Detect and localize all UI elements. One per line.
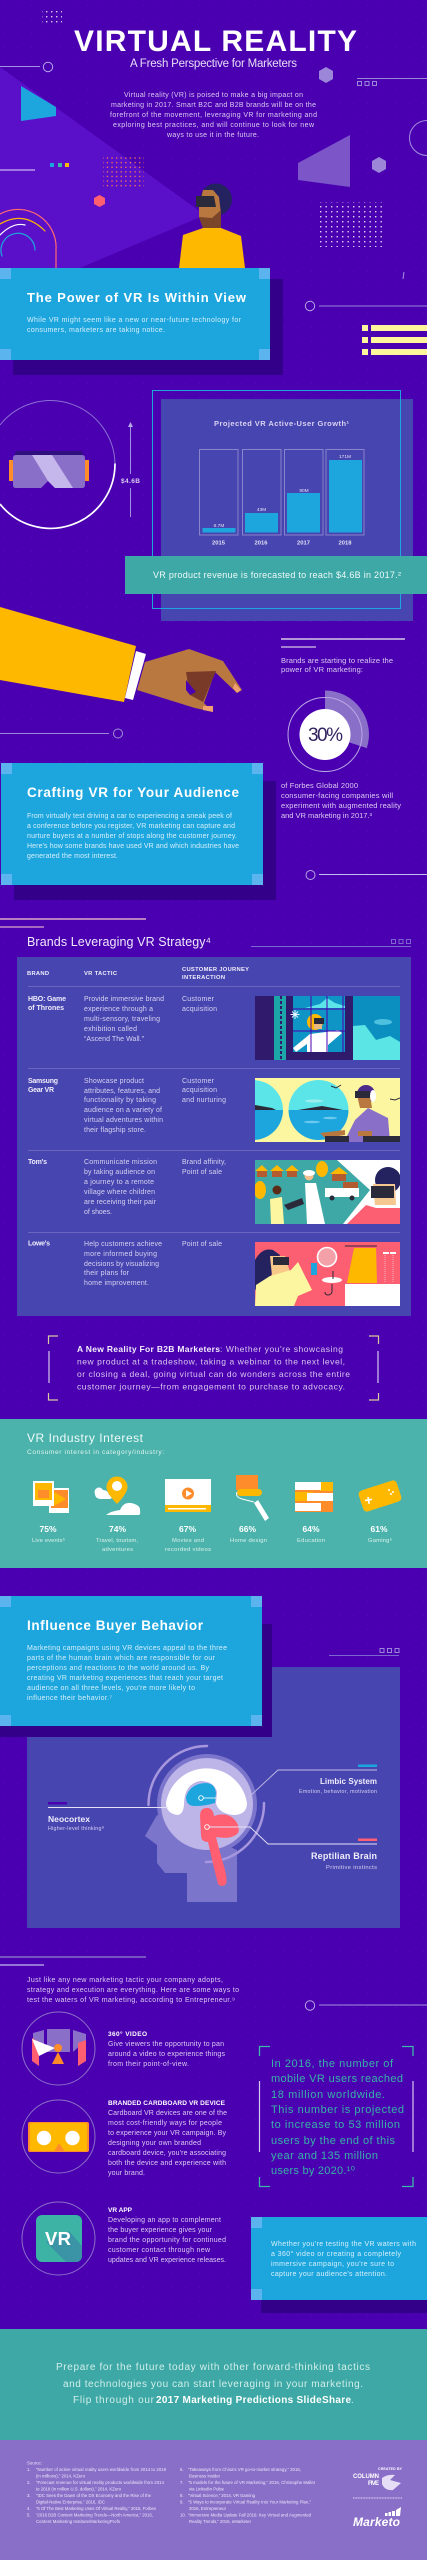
subtitle: A Fresh Perspective for Marketers (130, 58, 297, 70)
row: Lowe's: Point of sale (182, 1241, 222, 1248)
stats: industry percentages: 64% (302, 1524, 320, 1534)
source list: “IDC Sees the Dawn of the DX Economy and the Rise of the (36, 2493, 152, 2498)
row: Samsung: Samsung (28, 1078, 58, 1085)
label: neocortex: Higher-level thinking⁸ (48, 1826, 104, 1832)
source list: “Forecast revenue for virtual reality products worldwide from 2014 (36, 2480, 165, 2485)
text: cardboard VR: Cardboard VR devices are one of the (108, 2110, 227, 2117)
label: neocortex: Neocortex (48, 1814, 90, 1824)
heading: brands leveraging VR: Brands Leveraging VR Strategy⁴ (27, 935, 211, 949)
text: VR app: Developing an app to complement (108, 2217, 221, 2224)
row: Samsung: audience on a variety of (84, 1107, 162, 1114)
source list: 7. (180, 2480, 184, 2485)
panel: call to action: and technologies you can start leveraging in your marketing. (63, 2379, 363, 2390)
icon: game controller (358, 1479, 402, 1513)
row: HBO: exhibition called (84, 1026, 137, 1033)
stats: industry percentages (39, 1524, 388, 1534)
logo: Column Five (353, 2467, 403, 2498)
row: Lowe's: decisions by visualizing (84, 1261, 159, 1268)
source list: 10. (180, 2512, 186, 2518)
row: HBO: HBO: Game (28, 996, 66, 1003)
row: Tom's: a journey to a remote (84, 1179, 154, 1186)
source list: 2. (27, 2480, 31, 2485)
source list: Digital-Native Enterprise,” 2016, IDC (36, 2500, 105, 2504)
labels: industries: recorded videos (165, 1547, 211, 1553)
logo: Marketo: Marketo (353, 2515, 400, 2529)
labels: industries: Travel, tourism, (96, 1538, 138, 1544)
logo: Column Five: CREATED BY (378, 2467, 403, 2471)
panel: VR industry interest (0, 1419, 427, 1568)
panel: closing callout: immersive campaign, you're sure to (271, 2261, 394, 2268)
decoration: lines (0, 729, 427, 880)
illustration: arm and hand (0, 607, 242, 712)
row: Tom's: by taking audience on (84, 1169, 155, 1176)
intro text (110, 92, 317, 139)
row: Lowe's: their plans for (84, 1270, 130, 1277)
icon: VR app (22, 2202, 95, 2275)
stat callout: mobile VR users: to increase to 53 million (271, 2119, 400, 2131)
panel: closing callout: a 360° video or creating a completely (271, 2250, 402, 2258)
intro text: exploring best practices, and will continue to look for new (113, 122, 315, 129)
text: cardboard VR: your brand. (108, 2170, 145, 2177)
table header: INTERACTION (182, 975, 225, 981)
bar chart (200, 450, 364, 546)
labels: industries: Home design (230, 1538, 267, 1544)
icon: travel map pin (95, 1476, 140, 1515)
icon: video player (165, 1479, 211, 1512)
text: power of VR: While VR might seem like a new or near-future technology for (27, 317, 242, 324)
icon: paint roller (236, 1475, 269, 1521)
table header: VR TACTIC (84, 971, 118, 977)
row: Lowe's: Help customers achieve (84, 1241, 162, 1248)
revenue arrow: $4.6B (121, 478, 140, 485)
title: VIRTUAL REALITY (74, 25, 357, 58)
row: HBO (28, 996, 217, 1043)
source list: to 2018 (in million U.S. dollars),” 2014, KZero (36, 2486, 122, 2492)
row: Lowe's: more informed buying (84, 1251, 157, 1258)
table header: BRAND (27, 971, 49, 977)
text: crafting VR: nurture buyers at a number of stops along the customer journey. (27, 833, 237, 840)
text: 360 video: around a video to experience things (108, 2051, 226, 2058)
row: Lowe's: Lowe's (28, 1240, 50, 1248)
callout: B2B marketers: or closing a deal, going virtual can do wonders across the entire (77, 1369, 350, 1379)
labels: industries: Gaming⁶ (368, 1537, 393, 1544)
illustration: HBO ascend the wall (255, 996, 400, 1060)
stat: brands realize power: power of VR marketing: (281, 665, 363, 674)
text: tactics intro: Just like any new marketing tactic your company adopts, (27, 1977, 223, 1984)
logo: Marketo (353, 2507, 401, 2529)
logo: Column Five: COLUMN (353, 2474, 379, 2480)
labels: industries: Education (297, 1538, 325, 1544)
row: Samsung: Customer (182, 1078, 215, 1085)
source list (27, 2460, 316, 2524)
text: influence buyer behavior: parts of the human brain which are responsible for our (27, 1655, 216, 1662)
text: VR app: brand the opportunity for continued (108, 2237, 226, 2244)
stat callout: mobile VR users: mobile VR users reached (271, 2073, 403, 2085)
source list: Reality Trends,” 2016, eMarketer (189, 2519, 252, 2524)
decoration: heading rule (251, 940, 411, 946)
decoration: section rule (0, 1957, 146, 1965)
icon: live events photos (33, 1481, 69, 1513)
row: Lowe's (28, 1240, 222, 1287)
row: Tom's: village where children (84, 1189, 155, 1196)
icon: cardboard VR (22, 2100, 95, 2173)
labels: industries: Live events⁵ (32, 1537, 66, 1544)
decoration: line and list (305, 301, 427, 355)
illustration: Tom's village (254, 1160, 401, 1224)
panel: brands table (17, 957, 411, 1316)
callout: B2B marketers: new product at a tradeshow, taking a webinar to the next level, (77, 1356, 345, 1366)
text: influence buyer behavior (27, 1645, 227, 1702)
stats: industry percentages: 61% (370, 1524, 388, 1534)
panel: closing callout: Whether you're testing the VR waters with (271, 2241, 416, 2248)
donut chart: 30% (288, 690, 369, 772)
source list: (in millions),” 2014, KZero (36, 2474, 86, 2478)
illustration: head and brain (145, 1746, 264, 1902)
panel: influence buyer behavior (0, 1596, 272, 1737)
text: VR app: the buyer experience gives your (108, 2227, 213, 2234)
source list: 9. (180, 2500, 184, 2504)
source list: Business Insider (189, 2474, 221, 2478)
panel: closing callout: capture your audience's attention. (271, 2271, 387, 2278)
stat callout: mobile VR users: This number is projected (271, 2104, 404, 2116)
source list: 4. (27, 2506, 31, 2511)
decoration: line (305, 2001, 427, 2010)
callout: revenue forecast: VR product revenue is forecasted to reach $4.6B in 2017.² (153, 570, 401, 580)
label: reptilian brain: Reptilian Brain (311, 1851, 377, 1861)
stats: industry percentages: 74% (109, 1524, 126, 1534)
text: VR app (108, 2207, 226, 2264)
text: influence buyer behavior: perceptions and reactions to the world around us. By (27, 1665, 210, 1672)
text: Forbes stat: of Forbes Global 2000 (281, 781, 358, 790)
callout: B2B marketers: : Whether you're showcasing (220, 1344, 343, 1354)
row: Tom's: Communicate mission (84, 1159, 157, 1166)
text: tactics intro: strategy and execution are everything. Here are some ways to (27, 1987, 239, 1994)
row: HBO: Provide immersive brand (84, 996, 164, 1003)
text: Forbes stat: consumer-facing companies will (281, 791, 393, 800)
icon: books (295, 1482, 333, 1512)
bar chart: 2016 (255, 540, 268, 546)
stats: industry percentages: 67% (179, 1524, 196, 1534)
row: HBO: of Thrones (28, 1005, 64, 1012)
callout: revenue forecast (125, 556, 427, 594)
panel: crafting VR (1, 763, 276, 900)
callout: B2B marketers: customer journey—from engagement to purchase to advocacy. (77, 1382, 345, 1392)
row: Tom's (28, 1159, 226, 1216)
source list: “Immersive Media Update Fall 2016: Key Virtual and Augmented (188, 2512, 312, 2518)
text: 360 video: Give viewers the opportunity to pan (108, 2041, 224, 2048)
text: crafting VR: From virtually test driving a car to experiencing a sneak peek of (27, 813, 232, 820)
row: Samsung: functionality by taking (84, 1097, 156, 1104)
text: influence buyer behavior: audience on all three levels, you're more likely to (27, 1685, 195, 1692)
row: Samsung: and nurturing (182, 1097, 226, 1104)
illustration: Samsung Gear VR (255, 1078, 400, 1142)
text: VR app: VR APP (108, 2207, 133, 2214)
bar chart: 6.7M (214, 523, 224, 529)
heading: industry interest: VR Industry Interest (27, 1431, 144, 1445)
row: Tom's: are receiving their pair (84, 1199, 157, 1206)
illustration: person wearing VR headset (179, 184, 245, 268)
row: HBO: multi-sensory, traveling (84, 1016, 160, 1023)
text: influence buyer behavior: influence their behavior.⁷ (27, 1695, 112, 1702)
intro text: Virtual reality (VR) is poised to make a big impact on (124, 92, 303, 99)
text: tactics intro (27, 1977, 239, 2004)
chart heading: Projected VR Active-User Growth¹ (214, 419, 350, 428)
stats: industry percentages: 66% (239, 1524, 256, 1534)
bar chart: 2015 (212, 540, 226, 546)
decoration: rule (329, 1648, 399, 1656)
text: tactics intro: test the waters of VR marketing, according to Entrepreneur.⁹ (27, 1997, 235, 2004)
illustration: Lowe's home improvement (255, 1242, 400, 1306)
row: HBO: “Ascend The Wall.” (84, 1036, 145, 1043)
stat: brands realize power (281, 639, 405, 674)
source list: Content Marketing Institute/MarketingProfs (36, 2519, 120, 2524)
row: HBO: experience through a (84, 1006, 153, 1013)
source list: “2016 B2B Content Marketing Trends—North America,” 2016, (36, 2512, 153, 2518)
intro text: marketing in 2017. Smart B2C and B2B brands will be on the (111, 102, 316, 109)
panel: call to action: 2017 Marketing Predictions SlideShare (156, 2395, 351, 2406)
text: VR app: customer contact through new (108, 2247, 211, 2254)
stat callout: mobile VR users: users by 2020.¹⁰ (271, 2165, 356, 2177)
icon: 360 video (22, 2012, 95, 2085)
stat callout: mobile VR users: year and 135 million (271, 2150, 378, 2162)
text: influence buyer behavior: Marketing campaigns using VR devices appeal to the three (27, 1645, 227, 1652)
table header (27, 967, 249, 981)
text: Forbes stat: experiment with augmented reality (281, 801, 401, 810)
row: Tom's: of shoes. (84, 1209, 112, 1216)
stat callout: mobile VR users: In 2016, the number of (271, 2058, 394, 2070)
source list: “Number of active virtual reality users worldwide from 2014 to 2018 (36, 2467, 167, 2472)
row: Samsung: Gear VR (28, 1087, 54, 1094)
bar chart: 2017 (297, 540, 310, 546)
source list: 5. (27, 2512, 31, 2518)
source list: 1. (27, 2467, 31, 2472)
row: Samsung: virtual adventures within (84, 1117, 163, 1124)
panel: chart (152, 390, 413, 621)
panel: call to action: Prepare for the future today with other forward-thinking tactics (56, 2362, 370, 2373)
source list: “5 models for the future of VR Marketing,” 2016, Christophe Mallet (188, 2480, 316, 2485)
source list: via LinkedIn Pulse (189, 2486, 225, 2492)
panel: power of VR (0, 268, 283, 375)
callout: B2B marketers: A New Reality For B2B Marketers (77, 1344, 220, 1354)
source list: “6 Of The Best Marketing Uses Of Virtual Reality,” 2016, Forbes (36, 2506, 156, 2511)
heading: power of VR: The Power of VR Is Within View (27, 290, 247, 305)
label: limbic system: Emotion, behavior, motivation (299, 1789, 377, 1795)
row: Samsung: Showcase product (84, 1078, 144, 1085)
label: limbic system: Limbic System (320, 1777, 377, 1786)
stat callout: mobile VR users (260, 2046, 413, 2186)
label: reptilian brain (210, 1827, 377, 1871)
text: crafting VR: a conference before you register, VR marketing can capture and (27, 823, 235, 830)
labels: industries: Movies and (172, 1538, 204, 1544)
heading: influence buyer behavior: Influence Buyer Behavior (27, 1618, 204, 1633)
text: cardboard VR: most cost-friendly ways for people (108, 2120, 222, 2127)
panel: sources footer (0, 2440, 427, 2560)
panel: call to action (0, 2329, 427, 2440)
row: Tom's: Brand affinity, (182, 1159, 226, 1166)
text: 360 video: 360° VIDEO (108, 2030, 147, 2038)
stat callout: mobile VR users: users by the end of this (271, 2135, 396, 2147)
text: 360 video (108, 2030, 226, 2068)
intro text: ways to use it in the future. (166, 132, 259, 139)
text: cardboard VR: cardboard device, you're associating (108, 2150, 226, 2157)
bar chart: 2018 (339, 540, 352, 546)
revenue arrow (121, 422, 140, 517)
panel: closing callout (251, 2217, 427, 2313)
stat: brands realize power: Brands are starting to realize the (281, 656, 393, 665)
source list: Source: (27, 2460, 42, 2466)
subheading: industry interest: Consumer interest in category/industry: (27, 1449, 164, 1456)
icon: VR app: VR (45, 2228, 71, 2249)
text: crafting VR (27, 813, 239, 860)
text: power of VR (27, 317, 242, 334)
source list: 2016, Entrepreneur (189, 2506, 227, 2511)
row: Samsung (28, 1078, 226, 1134)
stat callout: mobile VR users: 18 million worldwide. (271, 2089, 385, 2101)
text: crafting VR: generated the most interest. (27, 853, 118, 860)
bar chart: 171M (339, 454, 351, 460)
panel: call to action: Flip through our (73, 2395, 155, 2406)
hero decoration (0, 8, 427, 279)
source list: “5 Ways to Incorporate Virtual Reality Into Your Marketing Plan,” (188, 2500, 312, 2504)
labels: industries: adventures (102, 1547, 133, 1553)
heading: crafting VR: Crafting VR for Your Audience (27, 785, 239, 800)
row: Tom's: Tom's (28, 1159, 47, 1166)
text: VR app: updates and VR experience releases. (108, 2257, 226, 2264)
source list: “Virtual Science,” 2014, VR Gaming (188, 2493, 256, 2498)
panel: call to action: . (351, 2395, 354, 2406)
text: power of VR: consumers, marketers are taking notice. (27, 327, 165, 334)
row: Lowe's: home improvement. (84, 1280, 149, 1287)
stats: industry percentages: 75% (39, 1524, 57, 1534)
logo: Column Five: FIVE (368, 2481, 379, 2487)
text: Forbes stat: and VR marketing in 2017.³ (281, 811, 372, 820)
text: cardboard VR (108, 2100, 227, 2177)
text: cardboard VR: to experience your VR campaign. By (108, 2130, 226, 2137)
intro text: forefront of the movement, leveraging VR for marketing and (110, 112, 317, 119)
text: Forbes stat (281, 781, 401, 820)
labels: industries (32, 1537, 393, 1553)
text: crafting VR: Here's how some brands have used VR and which industries have (27, 843, 239, 850)
text: 360 video: from their point-of-view. (108, 2061, 189, 2068)
row: HBO: Customer (182, 996, 215, 1003)
label: reptilian brain: Primitive instincts (326, 1865, 377, 1871)
label: neocortex (48, 1802, 168, 1832)
text: influence buyer behavior: creating VR marketing experiences that reach your target (27, 1675, 223, 1682)
panel: brain diagram (27, 1667, 400, 1928)
source list: “Takeaways from China's VR go-to-market strategy,” 2016, (188, 2467, 301, 2472)
bar chart: 90M (299, 488, 309, 494)
decoration: section rule (0, 919, 146, 927)
icon: VR headset in ring (0, 401, 115, 528)
row: Samsung: attributes, features, and (84, 1088, 160, 1095)
donut chart: 30%: 30% (308, 725, 343, 746)
text: cardboard VR: BRANDED CARDBOARD VR DEVICE (108, 2100, 226, 2107)
text: cardboard VR: designing your own branded (108, 2140, 201, 2147)
label: limbic system (248, 1764, 377, 1798)
bar chart: 43M (257, 507, 266, 513)
callout: B2B marketers (48, 1336, 378, 1400)
source list: 3. (27, 2493, 31, 2498)
source list: 6. (180, 2467, 184, 2472)
row: Samsung: acquisition (182, 1087, 217, 1094)
table header: CUSTOMER JOURNEY (182, 967, 249, 973)
row: HBO: acquisition (182, 1006, 217, 1013)
row: Tom's: Point of sale (182, 1169, 222, 1176)
source list: 8. (180, 2493, 184, 2498)
row: Samsung: their flagship store. (84, 1127, 146, 1134)
text: cardboard VR: both the device and experience with (108, 2160, 226, 2167)
